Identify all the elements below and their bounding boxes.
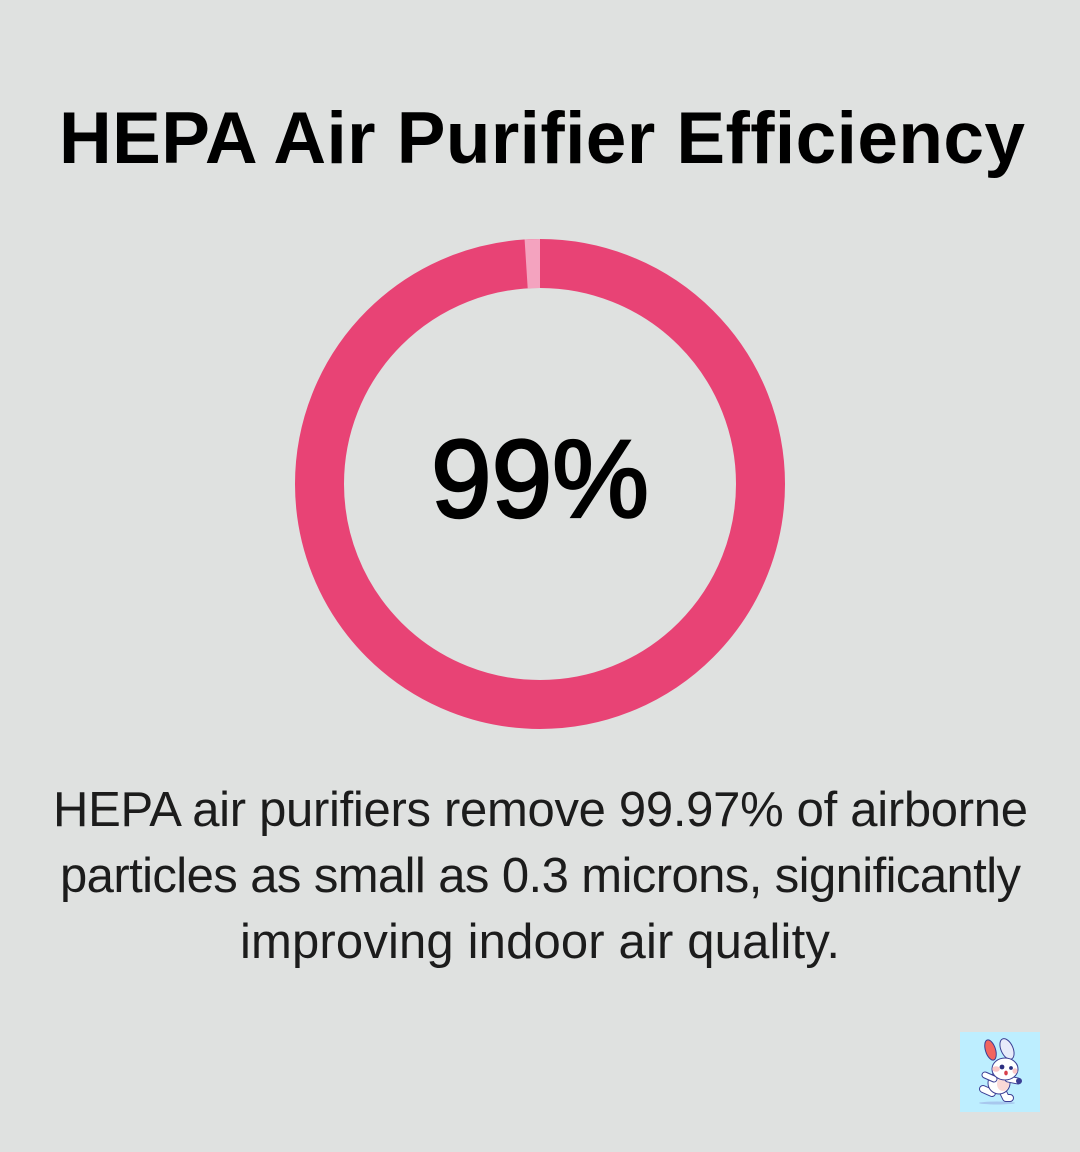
donut segment: remaining 1% [525, 239, 540, 288]
left ear [983, 1038, 998, 1062]
description text [53, 783, 1028, 969]
icon: bunny logo [960, 1032, 1040, 1112]
body [988, 1072, 1010, 1094]
right ear [997, 1037, 1017, 1061]
description text: particles as small as 0.3 microns, significantly [60, 849, 1022, 903]
legs [983, 1089, 1010, 1098]
description text: improving indoor air quality. [240, 915, 840, 969]
title: HEPA Air Purifier Efficiency [59, 98, 1025, 179]
description text: HEPA air purifiers remove 99.97% of airborne [53, 783, 1028, 837]
donut segment: 99% share [320, 264, 760, 704]
arms [985, 1075, 1018, 1081]
center value: 99% [431, 418, 649, 541]
head [992, 1058, 1018, 1080]
donut chart: 99% [320, 239, 760, 704]
